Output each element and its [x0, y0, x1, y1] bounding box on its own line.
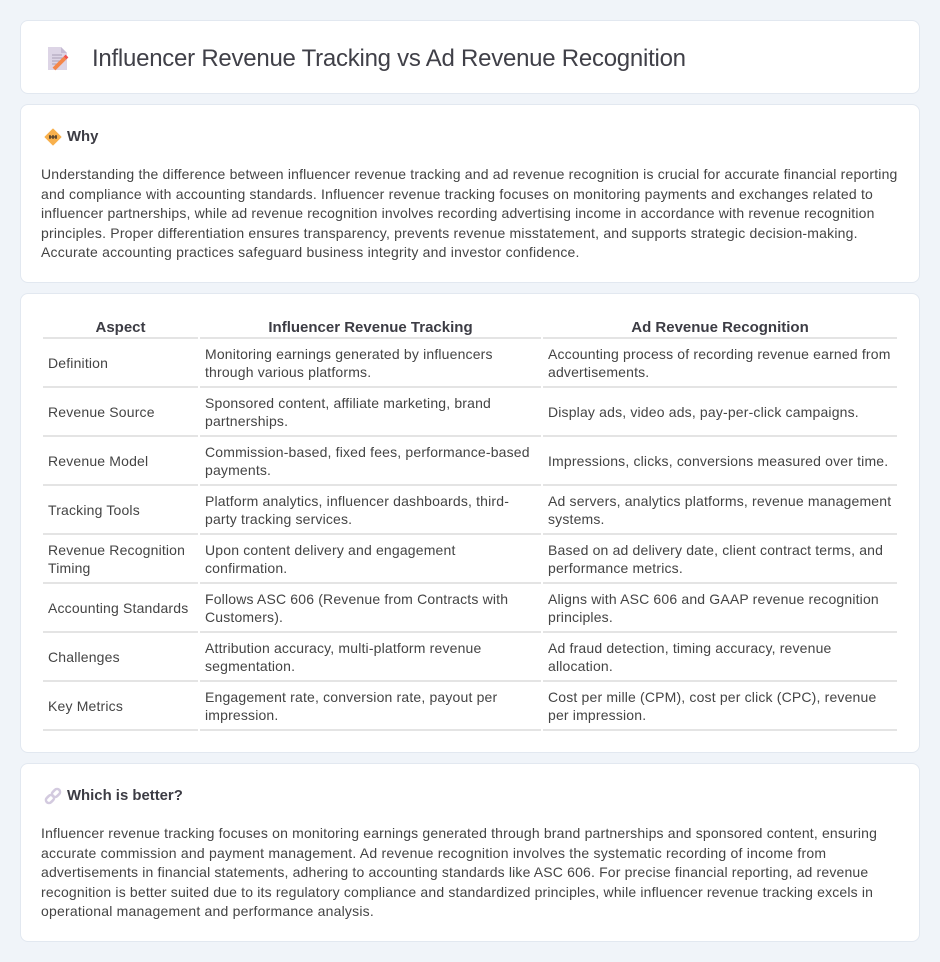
text block: which is better: advertisements in financial statements, adhering to accounting standards like ASC 606. For precise financial reporting, ad revenue [41, 864, 868, 880]
text block: why [41, 166, 898, 260]
panel: why [20, 104, 920, 283]
icon: link [44, 788, 62, 804]
comparison table: Tracking Tools [48, 502, 140, 518]
comparison table: performance metrics. [548, 560, 683, 576]
comparison table [43, 318, 897, 731]
text block: why: Understanding the difference between influencer revenue tracking and ad revenue recognition is crucial for accurate financial reporting [41, 166, 898, 182]
comparison table: Ad servers, analytics platforms, revenue management [548, 493, 891, 509]
comparison table: Challenges [48, 649, 120, 665]
comparison table: Sponsored content, affiliate marketing, brand [205, 395, 491, 411]
comparison table: per impression. [548, 707, 646, 723]
comparison table: Customers). [205, 609, 283, 625]
comparison table: confirmation. [205, 560, 287, 576]
comparison table: Commission-based, fixed fees, performance-based [205, 444, 530, 460]
comparison table: Impressions, clicks, conversions measured over time. [548, 453, 888, 469]
comparison table: segmentation. [205, 658, 295, 674]
heading: why: Why [67, 129, 98, 145]
text block: which is better: recognition is better suited due to its regulatory compliance and standardized principles, while influencer revenue tracking excels in [41, 884, 873, 900]
panel: comparison table [20, 293, 920, 753]
comparison table: Based on ad delivery date, client contract terms, and [548, 542, 883, 558]
comparison table: Aligns with ASC 606 and GAAP revenue recognition [548, 591, 879, 607]
comparison table: allocation. [548, 658, 613, 674]
text block: which is better [41, 825, 877, 919]
comparison table: Revenue Model [48, 453, 148, 469]
text block: why: influencer partnerships, while ad revenue recognition involves recording advertising income in accordance with revenue recognition [41, 205, 875, 221]
comparison table: Timing [48, 560, 91, 576]
heading: which is better: Which is better? [67, 788, 183, 804]
comparison table: through various platforms. [205, 364, 371, 380]
panel: which is better [20, 763, 920, 942]
comparison table: Definition [48, 355, 108, 371]
comparison table: Ad Revenue Recognition [631, 318, 809, 336]
comparison table: principles. [548, 609, 613, 625]
comparison table: Attribution accuracy, multi-platform revenue [205, 640, 481, 656]
comparison table: Revenue Recognition [48, 542, 185, 558]
comparison table: Monitoring earnings generated by influencers [205, 346, 493, 362]
text block: which is better: accurate commission and payment management. Ad revenue recognition involves the systematic recording of income from [41, 845, 826, 861]
comparison table: Display ads, video ads, pay-per-click campaigns. [548, 404, 859, 420]
comparison table: Key Metrics [48, 698, 123, 714]
comparison table: Platform analytics, influencer dashboards, third- [205, 493, 509, 509]
comparison table: partnerships. [205, 413, 288, 429]
comparison table: Accounting Standards [48, 600, 188, 616]
comparison table: Follows ASC 606 (Revenue from Contracts with [205, 591, 508, 607]
comparison table: Engagement rate, conversion rate, payout per [205, 689, 497, 705]
header card [20, 20, 920, 94]
comparison table: Aspect [95, 318, 146, 336]
text block: which is better: operational management and performance analysis. [41, 903, 374, 919]
icon: document with pencil [48, 47, 68, 70]
comparison table: Upon content delivery and engagement [205, 542, 456, 558]
comparison table: payments. [205, 462, 271, 478]
comparison table: advertisements. [548, 364, 649, 380]
title: Influencer Revenue Tracking vs Ad Revenue Recognition [92, 45, 686, 72]
comparison table: impression. [205, 707, 278, 723]
text block: which is better: Influencer revenue tracking focuses on monitoring earnings generated through brand partnerships and sponsored content, ensuring [41, 825, 877, 841]
text block: why: Accurate accounting practices safeguard business integrity and investor confidence. [41, 244, 580, 260]
comparison table: party tracking services. [205, 511, 352, 527]
text block: why: principles. Proper differentiation ensures transparency, prevents revenue misstatement, and supports strategic decision-making. [41, 225, 858, 241]
comparison table: Influencer Revenue Tracking [268, 318, 473, 336]
comparison table: Ad fraud detection, timing accuracy, revenue [548, 640, 831, 656]
comparison table: Accounting process of recording revenue earned from [548, 346, 891, 362]
icon: orange diamond [44, 128, 62, 146]
comparison table: Revenue Source [48, 404, 155, 420]
comparison table: systems. [548, 511, 605, 527]
comparison table: Cost per mille (CPM), cost per click (CPC), revenue [548, 689, 876, 705]
text block: why: and compliance with accounting standards. Influencer revenue tracking focuses on monitoring payments and exchanges related to [41, 186, 873, 202]
